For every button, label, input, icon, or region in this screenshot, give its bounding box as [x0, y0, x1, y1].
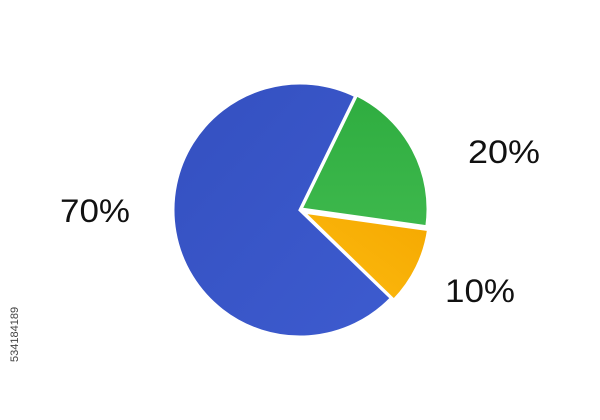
slice: 10% yellow	[303, 212, 428, 300]
slice: 20% green	[301, 95, 428, 227]
side id text: 534184189	[9, 307, 21, 362]
label: 20%: 20%	[468, 134, 540, 170]
label: 70%: 70%	[60, 193, 130, 229]
label: 10%: 10%	[445, 273, 515, 309]
slice: 70% blue	[173, 83, 391, 337]
